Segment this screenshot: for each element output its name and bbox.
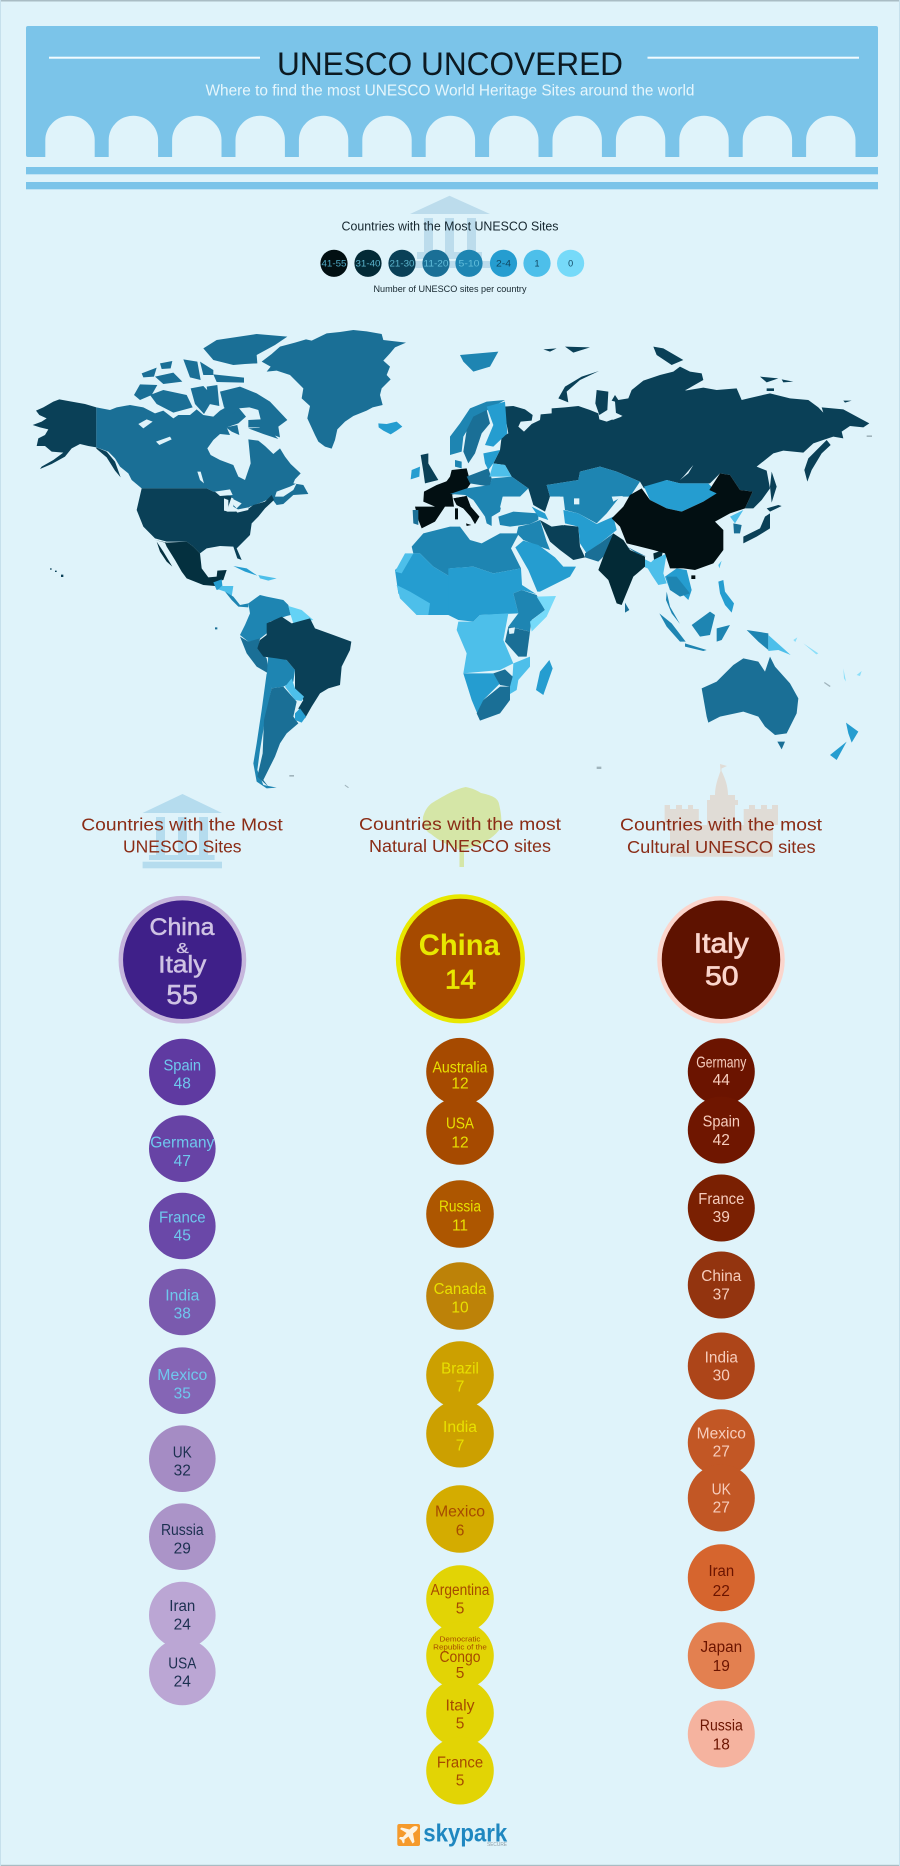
India: [149, 1269, 216, 1335]
Mexico: Mexico: [157, 1367, 207, 1384]
heading: cultural sites: [620, 815, 822, 857]
Democratic Republic of the Congo: Democratic: [440, 1635, 481, 1644]
UK: [688, 1464, 755, 1532]
Democratic Republic of the Congo: Congo: [440, 1649, 480, 1666]
heading: cultural sites: Countries with the most: [620, 815, 822, 835]
USA: [149, 1639, 216, 1705]
top: China: China: [419, 929, 500, 962]
Germany: Germany: [696, 1055, 746, 1072]
Canada: 10: [451, 1300, 469, 1317]
subtitle: Where to find the most UNESCO World Heritage Sites around the world: [206, 82, 694, 100]
Iran: 22: [713, 1583, 730, 1600]
France: France: [437, 1755, 483, 1772]
map: Americas and western Europe: [33, 330, 454, 788]
Australia: Australia: [432, 1060, 488, 1077]
title: UNESCO UNCOVERED: [277, 46, 623, 82]
heading: natural sites: Countries with the most: [359, 814, 561, 834]
Australia: 12: [451, 1076, 469, 1093]
legend scale: 2-4: [496, 258, 511, 268]
top: China: [398, 896, 523, 1021]
Japan: [688, 1622, 755, 1689]
header banner: [26, 26, 878, 189]
Mexico: [426, 1485, 494, 1553]
Spain: [688, 1096, 755, 1164]
USA: 24: [174, 1674, 191, 1691]
top: Italy: [660, 898, 782, 1021]
India: [688, 1332, 755, 1400]
UK: 27: [713, 1500, 730, 1517]
map: Africa, Asia and Oceania: [445, 347, 872, 769]
India: [426, 1400, 494, 1467]
Russia: Russia: [439, 1199, 481, 1216]
icon: tree: [423, 787, 501, 867]
legend scale: 5-10: [458, 258, 480, 268]
Spain: 48: [174, 1076, 191, 1093]
Germany: [149, 1115, 216, 1182]
China: [688, 1252, 755, 1318]
heading: cultural sites: Cultural UNESCO sites: [627, 837, 816, 857]
Canada: Canada: [434, 1281, 487, 1298]
Russia: Russia: [700, 1718, 743, 1735]
Russia: 11: [452, 1218, 468, 1235]
column 2 heading group: [359, 787, 561, 867]
Iran: [149, 1582, 216, 1648]
Mexico: [688, 1409, 755, 1476]
top: China and Italy: China: [150, 914, 215, 941]
heading: most sites: [81, 815, 283, 856]
UK: UK: [173, 1444, 192, 1461]
column 1: most sites: [121, 898, 244, 1705]
Canada: [426, 1262, 494, 1330]
Russia: 29: [174, 1540, 191, 1557]
heading: natural sites: [359, 814, 561, 856]
secure: SECURE: [487, 1842, 507, 1848]
Italy: 5: [456, 1716, 464, 1733]
legend scale: [320, 250, 584, 277]
column 3: cultural sites: [660, 898, 782, 1768]
Democratic Republic of the Congo: [426, 1622, 494, 1689]
France: [426, 1737, 494, 1804]
icon: legend temple: [410, 196, 490, 268]
France: France: [698, 1191, 744, 1208]
heading: natural sites: Natural UNESCO sites: [369, 836, 551, 856]
France: [688, 1174, 755, 1242]
top: China and Italy: Italy: [158, 952, 206, 979]
UK: 32: [174, 1462, 191, 1479]
Germany: 44: [713, 1072, 730, 1089]
India: India: [165, 1288, 200, 1305]
USA: USA: [168, 1655, 197, 1672]
France: 39: [713, 1209, 730, 1226]
wordmark: skypark: [423, 1820, 507, 1848]
Iran: [688, 1544, 755, 1611]
UK: UK: [712, 1481, 732, 1498]
Spain: 42: [713, 1132, 730, 1149]
top: China: 14: [445, 964, 476, 994]
legend scale: 21-30: [390, 258, 414, 268]
India: India: [443, 1419, 477, 1436]
UK: [149, 1425, 216, 1492]
India: 30: [713, 1368, 730, 1385]
Germany: Germany: [150, 1134, 215, 1151]
icon: castle: [665, 764, 778, 857]
icon: temple: [143, 794, 222, 868]
top: Italy: 50: [705, 961, 739, 991]
Mexico: 35: [174, 1385, 191, 1402]
China: 37: [713, 1286, 730, 1303]
legend caption: Number of UNESCO sites per country: [374, 284, 527, 295]
Democratic Republic of the Congo: 5: [456, 1665, 464, 1682]
Russia: [688, 1700, 755, 1768]
Mexico: 6: [456, 1522, 464, 1539]
Russia: 18: [713, 1736, 730, 1753]
Germany: 47: [174, 1153, 191, 1170]
Argentina: Argentina: [431, 1582, 490, 1599]
France: 5: [456, 1773, 464, 1790]
India: India: [705, 1350, 738, 1367]
heading: most sites: Countries with the Most: [81, 815, 283, 835]
column 1 heading group: [81, 794, 283, 868]
Mexico: [149, 1347, 216, 1414]
top: China and Italy: [121, 898, 244, 1021]
France: 45: [174, 1228, 191, 1245]
column 3 heading group: [620, 764, 822, 857]
icon: plane: [397, 1824, 420, 1846]
logo: skypark secure: [397, 1820, 507, 1848]
Brazil: Brazil: [441, 1360, 479, 1377]
Iran: Iran: [169, 1598, 195, 1615]
top: China and Italy: &: [176, 940, 189, 957]
Mexico: 27: [713, 1444, 730, 1461]
heading: most sites: UNESCO Sites: [123, 836, 242, 856]
Russia: [426, 1180, 494, 1248]
France: [149, 1193, 216, 1259]
USA: USA: [446, 1116, 475, 1133]
Japan: Japan: [700, 1639, 742, 1656]
USA: 12: [451, 1134, 469, 1151]
India: 7: [456, 1438, 464, 1455]
Russia: [149, 1503, 216, 1570]
Spain: Spain: [703, 1114, 740, 1131]
Spain: [149, 1039, 216, 1105]
USA: [426, 1097, 494, 1165]
top: Italy: Italy: [694, 928, 749, 959]
Mexico: Mexico: [435, 1504, 485, 1521]
Australia: [426, 1038, 494, 1105]
Brazil: 7: [456, 1379, 464, 1396]
top: China and Italy: 55: [166, 979, 198, 1010]
Iran: Iran: [708, 1563, 734, 1580]
legend scale: 1: [534, 258, 540, 268]
Iran: 24: [174, 1616, 191, 1633]
Germany: [688, 1038, 755, 1105]
column 2: natural sites: [398, 896, 523, 1804]
Japan: 19: [713, 1658, 730, 1675]
Democratic Republic of the Congo: Republic of the: [433, 1643, 487, 1652]
Italy: Italy: [446, 1698, 475, 1715]
Italy: [426, 1679, 494, 1747]
Argentina: 5: [456, 1600, 464, 1617]
legend scale: 41-55: [322, 258, 346, 268]
legend scale: 0: [568, 258, 573, 268]
Argentina: [426, 1565, 494, 1633]
legend title: Countries with the Most UNESCO Sites: [342, 220, 558, 234]
world map: [33, 330, 872, 788]
Mexico: Mexico: [697, 1425, 746, 1442]
France: France: [159, 1210, 206, 1227]
legend scale: 31-40: [356, 258, 380, 268]
Brazil: [426, 1341, 494, 1409]
China: China: [701, 1268, 742, 1285]
Spain: Spain: [164, 1058, 201, 1075]
India: 38: [174, 1306, 191, 1323]
Russia: Russia: [161, 1522, 204, 1539]
legend scale: 11-20: [424, 258, 448, 268]
